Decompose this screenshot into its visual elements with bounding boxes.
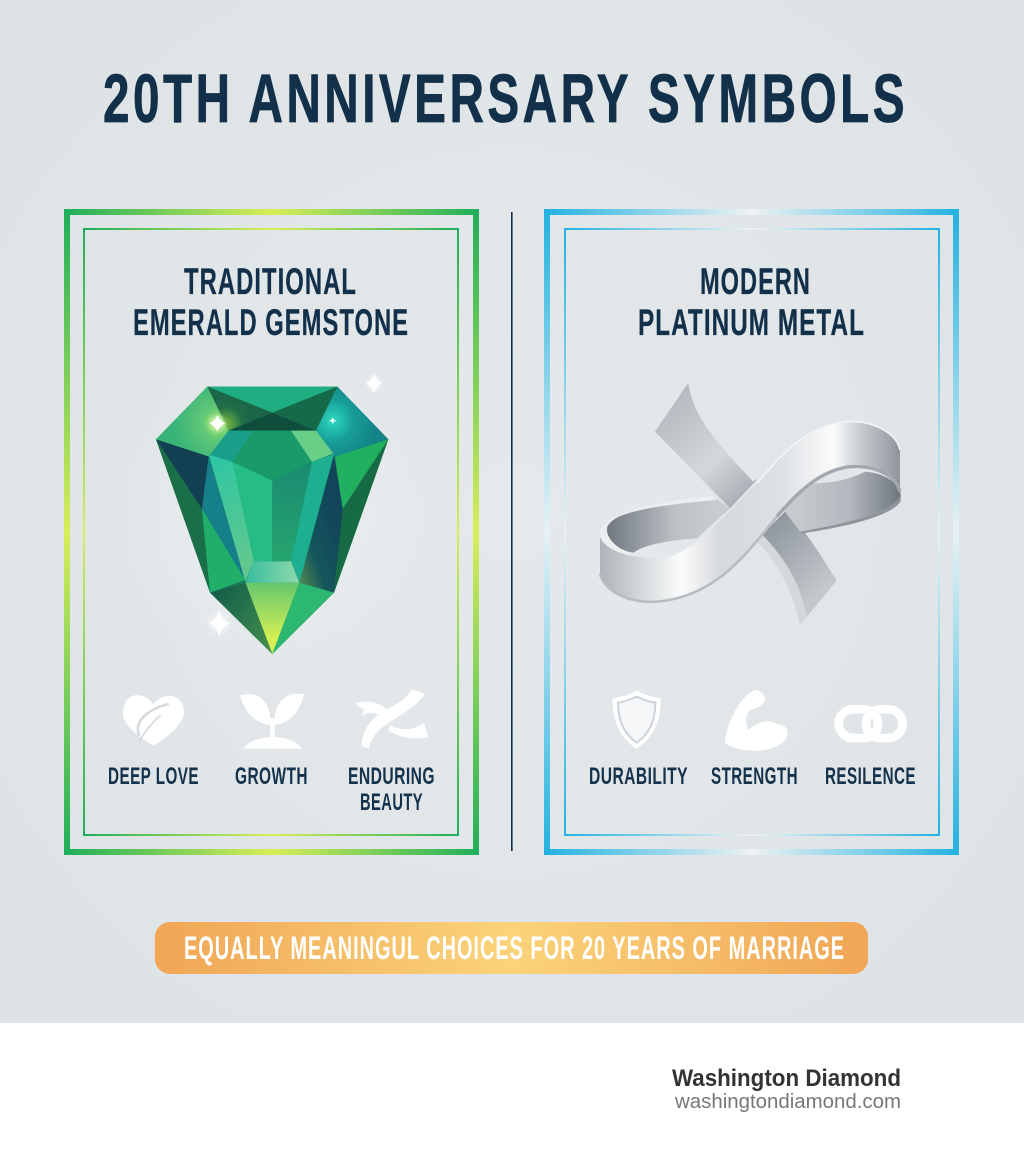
icon: intertwined ribbons <box>355 689 428 749</box>
heading: modern platinum metal: PLATINUM METAL <box>638 302 865 343</box>
icon: sprout <box>240 694 304 749</box>
icon: heart with leaf <box>123 695 184 746</box>
label: resilence: RESILENCE <box>825 763 916 790</box>
footer brand <box>672 1065 901 1113</box>
panel: modern platinum <box>544 209 959 855</box>
footer band <box>0 1023 1024 1154</box>
panel: traditional emerald <box>64 209 479 855</box>
label: enduring beauty: BEAUTY <box>360 789 423 816</box>
callout banner <box>155 922 868 974</box>
label: strength: STRENGTH <box>711 763 798 790</box>
heading: modern platinum metal <box>638 261 865 343</box>
heading: traditional emerald gemstone <box>133 261 409 343</box>
panel frame: platinum <box>544 209 959 855</box>
icon: chain links <box>839 709 903 738</box>
footer brand: Washington Diamond <box>672 1065 901 1092</box>
center divider <box>511 212 513 851</box>
icon: shield <box>613 691 661 749</box>
panel frame: emerald <box>64 209 479 855</box>
heading: traditional emerald gemstone: EMERALD GEMSTONE <box>133 302 409 343</box>
label: durability: DURABILITY <box>589 763 688 790</box>
icon: platinum ribbon <box>600 383 901 625</box>
icon: flexed arm <box>725 690 788 751</box>
label: enduring beauty: ENDURING <box>348 763 435 790</box>
label: growth: GROWTH <box>235 763 308 790</box>
label: enduring beauty <box>348 763 435 816</box>
heading: traditional emerald gemstone: TRADITIONAL <box>184 261 357 302</box>
label: deep love: DEEP LOVE <box>108 763 199 790</box>
icon: emerald gem <box>119 357 426 677</box>
footer brand: washingtondiamond.com <box>674 1091 901 1113</box>
heading: modern platinum metal: MODERN <box>700 261 811 302</box>
